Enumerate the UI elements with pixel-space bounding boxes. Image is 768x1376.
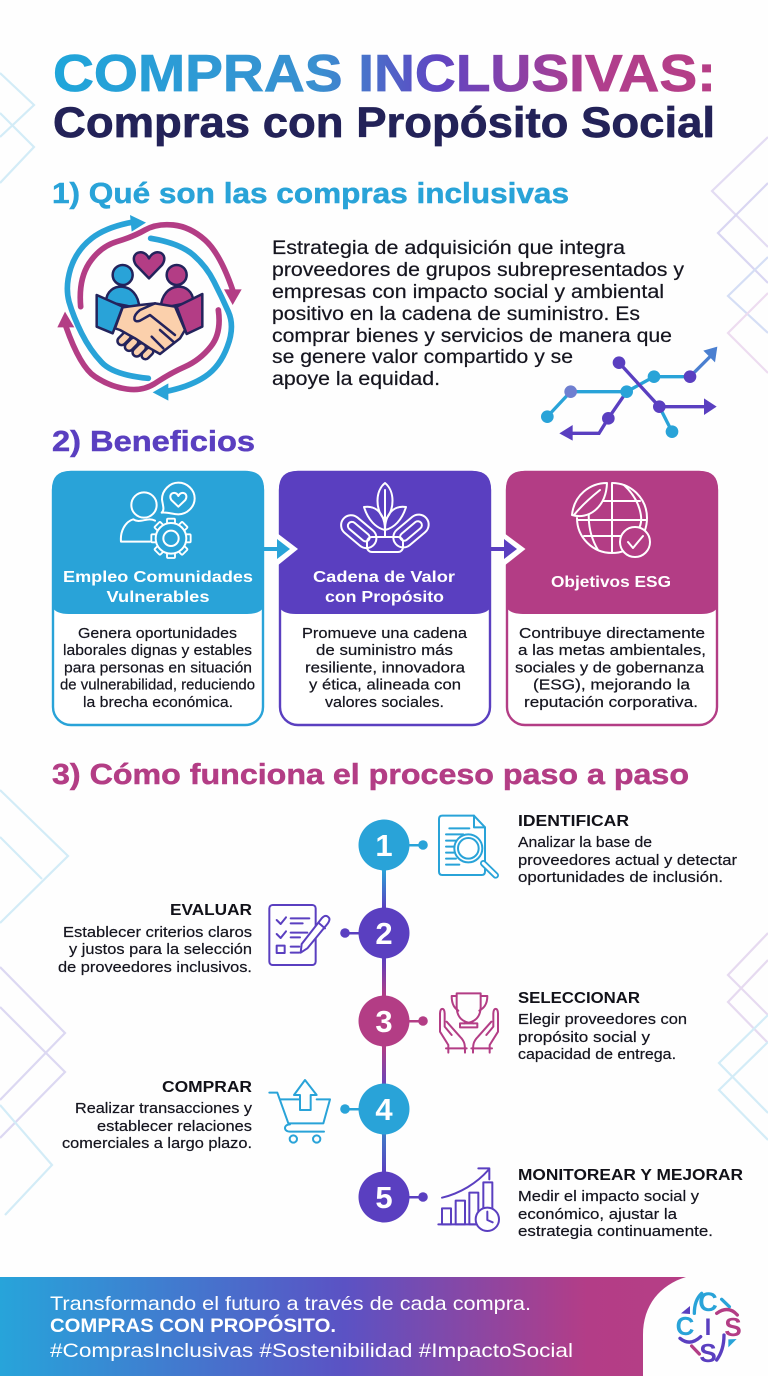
card title: Empleo Comunidades — [63, 569, 253, 586]
logo: CISS: I — [705, 1314, 711, 1341]
card text — [60, 626, 255, 711]
title: COMPRAS INCLUSIVAS: — [53, 45, 716, 103]
step 2 marker: 2 — [375, 916, 393, 951]
text block: definition — [272, 238, 685, 390]
card text: (ESG), mejorando la — [533, 678, 691, 694]
card title: con Propósito — [325, 589, 444, 606]
step 5 text: económico, ajustar la — [518, 1207, 678, 1223]
card text: para personas en situación — [64, 660, 252, 676]
text block: definition: se genere valor compartido y se — [272, 347, 573, 368]
icon: network arrows — [541, 347, 717, 441]
step 4 marker — [340, 1084, 410, 1134]
heading: section 2: 2) Beneficios — [52, 426, 255, 458]
icon: checklist and pencil — [269, 905, 329, 965]
step 4 text: COMPRAR — [162, 1079, 252, 1096]
logo: CISS: C — [698, 1287, 718, 1317]
panel: objetivos ESG — [506, 471, 718, 725]
step 1 text: IDENTIFICAR — [518, 813, 629, 830]
timeline line — [382, 868, 386, 1174]
card text: valores sociales. — [325, 695, 444, 711]
logo: CISS: S — [699, 1338, 717, 1368]
card text: Promueve una cadena — [302, 626, 468, 642]
step 4 text: comerciales a largo plazo. — [62, 1136, 252, 1152]
card text: reputación corporativa. — [524, 695, 698, 711]
card text: de suministro más — [316, 643, 453, 659]
card text — [515, 626, 706, 711]
icon: trophy and hands — [440, 993, 498, 1053]
step 3 text: propósito social y — [518, 1030, 651, 1046]
icon: shopping cart — [269, 1080, 330, 1143]
icon: growth chart and clock — [438, 1168, 499, 1231]
card text: Genera oportunidades — [78, 626, 237, 642]
title: Compras con Propósito Social — [53, 99, 715, 147]
step 5 marker — [358, 1172, 428, 1222]
step 3 text: SELECCIONAR — [518, 990, 640, 1007]
card text: y ética, alineada con — [309, 678, 461, 694]
icon: document and magnifier — [439, 816, 496, 875]
step 2 text: de proveedores inclusivos. — [58, 960, 252, 976]
heading: section 3: 3) Cómo funciona el proceso paso a paso — [52, 759, 689, 791]
step 1 text — [518, 813, 737, 886]
footer text: Transformando el futuro a través de cada compra. — [50, 1293, 531, 1315]
logo: CISS: S — [724, 1312, 742, 1342]
title — [53, 45, 716, 147]
card title — [63, 569, 253, 606]
step 3 marker: 3 — [375, 1004, 393, 1039]
step 2 text — [58, 902, 252, 976]
heading: section 1: 1) Qué son las compras inclusivas — [52, 178, 569, 210]
card text: de vulnerabilidad, reduciendo — [60, 678, 255, 694]
step 3 text — [518, 990, 687, 1063]
card title: Objetivos ESG — [551, 574, 671, 591]
step 5 text: estrategia continuamente. — [518, 1224, 713, 1240]
card text: laborales dignas y estables — [63, 643, 252, 659]
step 5 text — [518, 1167, 743, 1240]
icon: handshake with circular arrows — [57, 215, 242, 401]
panel: cadena de valor con propósito — [279, 471, 491, 725]
step 3 text: Elegir proveedores con — [518, 1012, 687, 1028]
text block: definition: Estrategia de adquisición que integra — [272, 238, 625, 259]
step 1 marker: 1 — [375, 828, 393, 863]
footer text: COMPRAS CON PROPÓSITO. — [50, 1313, 336, 1337]
footer text — [50, 1293, 573, 1362]
icon: plant and chain — [337, 483, 433, 552]
footer text: #ComprasInclusivas #Sostenibilidad #ImpactoSocial — [50, 1340, 573, 1362]
step 1 text: oportunidades de inclusión. — [518, 870, 723, 886]
text block: definition: comprar bienes y servicios de manera que — [272, 326, 672, 347]
text block: definition: proveedores de grupos subrepresentados y — [272, 260, 685, 281]
step 2 text: y justos para la selección — [69, 942, 252, 958]
card text: sociales y de gobernanza — [515, 660, 705, 676]
step 1 text: Analizar la base de — [518, 835, 652, 851]
step 1 marker — [358, 820, 428, 870]
step 5 marker: 5 — [375, 1180, 393, 1215]
card text: resiliente, innovadora — [305, 660, 466, 676]
logo: CISS — [676, 1287, 742, 1368]
card title: Vulnerables — [106, 589, 210, 606]
step 1 text: proveedores actual y detectar — [518, 853, 737, 869]
card text: la brecha económica. — [83, 695, 233, 711]
step 5 text: Medir el impacto social y — [518, 1189, 700, 1205]
card text — [302, 626, 468, 711]
card text: a las metas ambientales, — [518, 643, 706, 659]
step 2 marker — [340, 908, 410, 958]
text block: definition: positivo en la cadena de suministro. Es — [272, 304, 640, 325]
icon: person, heart bubble and gear — [121, 483, 195, 558]
logo: CISS: C — [676, 1311, 695, 1341]
arrow: card 2 to card 3 — [491, 533, 526, 566]
text block: definition: apoye la equidad. — [272, 369, 440, 390]
step 4 marker: 4 — [375, 1092, 393, 1127]
footer banner — [0, 1277, 686, 1376]
card text: Contribuye directamente — [519, 626, 705, 642]
panel: empleo comunidades vulnerables — [52, 471, 264, 725]
icon: globe, leaf and check — [572, 483, 650, 557]
step 4 text: establecer relaciones — [97, 1119, 252, 1135]
step 2 text: Establecer criterios claros — [63, 925, 252, 941]
step 3 text: capacidad de entrega. — [518, 1047, 676, 1063]
step 2 text: EVALUAR — [170, 902, 252, 919]
text block: definition: empresas con impacto social y ambiental — [272, 282, 664, 303]
step 3 marker — [358, 996, 428, 1046]
step 5 text: MONITOREAR Y MEJORAR — [518, 1167, 743, 1184]
card title: Cadena de Valor — [313, 569, 455, 586]
step 4 text: Realizar transacciones y — [75, 1101, 253, 1117]
card title — [313, 569, 455, 606]
arrow: card 1 to card 2 — [264, 533, 298, 566]
step 4 text — [62, 1079, 253, 1152]
